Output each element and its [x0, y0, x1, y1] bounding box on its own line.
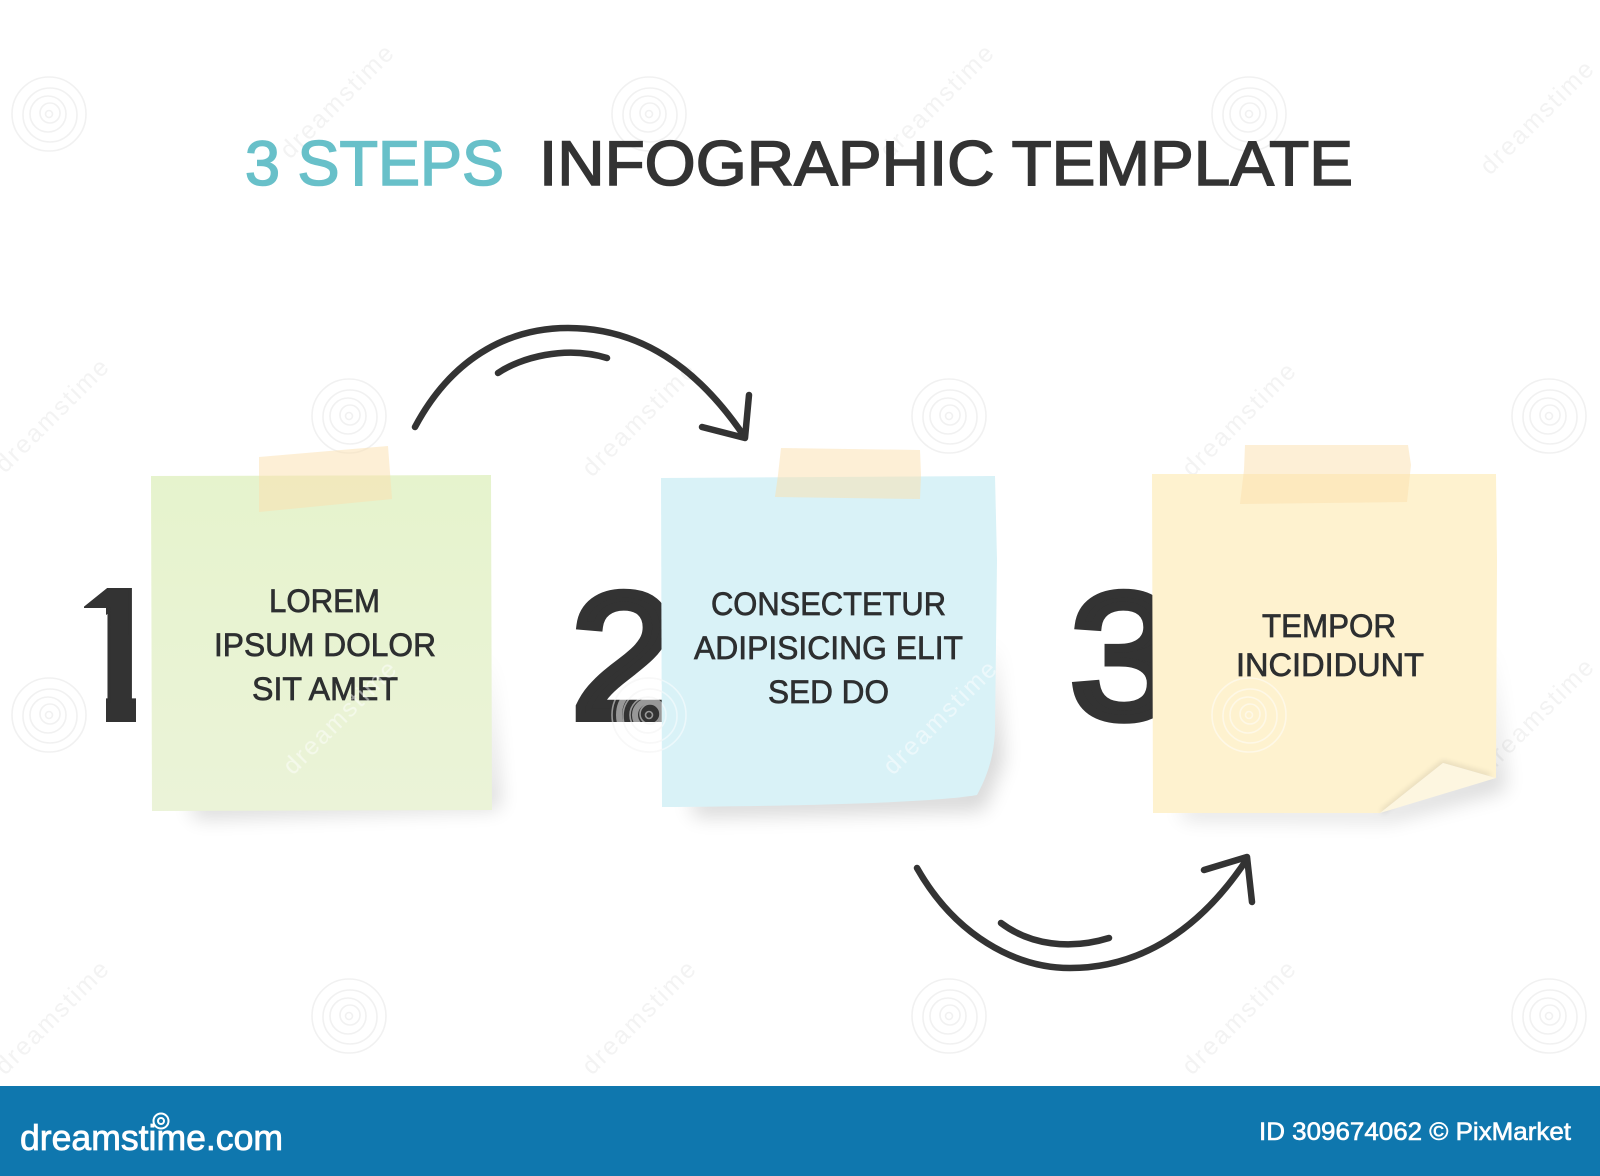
- panel: step 1: [73, 446, 500, 818]
- note text: ADIPISICING ELIT: [694, 630, 963, 666]
- panel: step 3: [1070, 445, 1506, 820]
- note shadow: [190, 650, 500, 818]
- yellow sticky note: [1152, 474, 1497, 813]
- image id credit: ID 309674062 © PixMarket: [1259, 1118, 1571, 1146]
- note shadow: [1180, 640, 1506, 820]
- watermark background: dreamstime: [1474, 54, 1600, 180]
- number 2: 2: [571, 556, 676, 756]
- corner fold: [1380, 763, 1496, 813]
- arrow: step 1 to step 2: [415, 328, 749, 438]
- note text: IPSUM DOLOR: [214, 627, 436, 663]
- blue sticky note: [661, 476, 997, 807]
- note text: SED DO: [768, 674, 889, 710]
- title: INFOGRAPHIC TEMPLATE: [539, 129, 1353, 199]
- note text: CONSECTETUR: [711, 586, 946, 622]
- footer bar: [0, 1086, 1600, 1176]
- tape: [775, 448, 921, 499]
- watermark background: dreamstime: [1474, 652, 1600, 778]
- tape: [259, 446, 392, 512]
- icon: spiral: [154, 1114, 168, 1128]
- note text: [1236, 608, 1424, 683]
- panel: step 2: [571, 448, 1003, 816]
- note text: TEMPOR: [1262, 608, 1396, 644]
- title: 3 STEPS: [245, 129, 504, 199]
- dreamstime logo: dreamstime.com: [20, 1117, 283, 1158]
- watermark background: dreamstime: [1176, 954, 1303, 1080]
- green sticky note: [151, 475, 492, 811]
- watermark overlay: [286, 664, 1287, 774]
- watermark background: dreamstime: [576, 356, 703, 482]
- note shadow: [690, 640, 1003, 816]
- number 3: 3: [1070, 556, 1178, 756]
- arrow: step 2 to step 3: [917, 857, 1252, 968]
- watermark background: dreamstime: [274, 38, 401, 164]
- note text: LOREM: [269, 583, 380, 619]
- note text: SIT AMET: [252, 671, 398, 707]
- watermark background: dreamstime: [1176, 356, 1303, 482]
- note text: INCIDIDUNT: [1236, 647, 1424, 683]
- watermark background: dreamstime: [874, 38, 1001, 164]
- number 1: 1: [73, 546, 159, 761]
- watermark overlay: dreamstime: [277, 654, 404, 780]
- note text: [214, 583, 436, 707]
- note text: [694, 586, 963, 710]
- watermark background: dreamstime: [576, 954, 703, 1080]
- tape: [1240, 445, 1411, 504]
- watermark overlay: dreamstime: [877, 654, 1004, 780]
